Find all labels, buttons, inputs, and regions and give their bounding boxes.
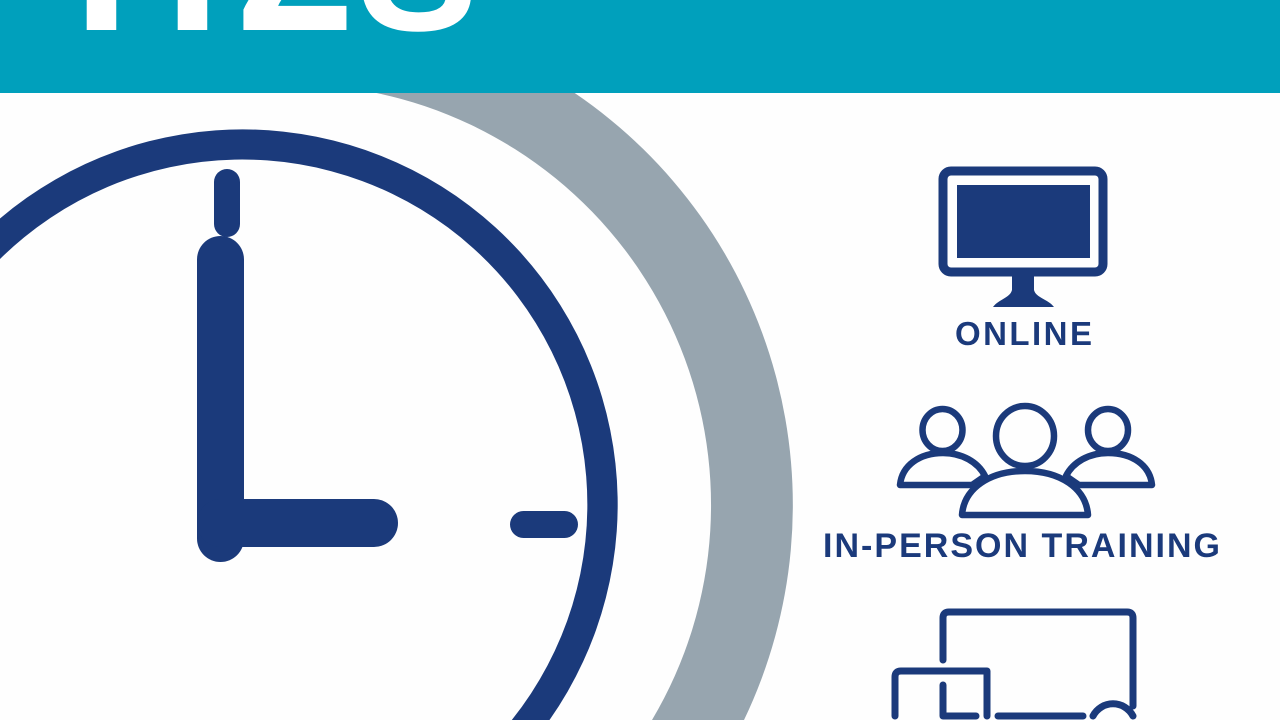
12 o'clock tick	[214, 169, 240, 237]
icon: online monitor	[943, 171, 1103, 307]
label: in-person training: IN-PERSON TRAINING	[823, 527, 1220, 565]
hour hand	[197, 499, 398, 547]
label: online: ONLINE	[955, 315, 1092, 352]
clock icon	[0, 129, 618, 720]
minute hand	[197, 236, 244, 562]
header banner	[0, 0, 1280, 93]
icon: in-person group	[900, 406, 1152, 515]
icon: blended devices	[895, 612, 1133, 716]
clock ring	[0, 129, 618, 720]
gray arc behind clock	[377, 93, 793, 720]
3 o'clock tick	[510, 511, 578, 538]
